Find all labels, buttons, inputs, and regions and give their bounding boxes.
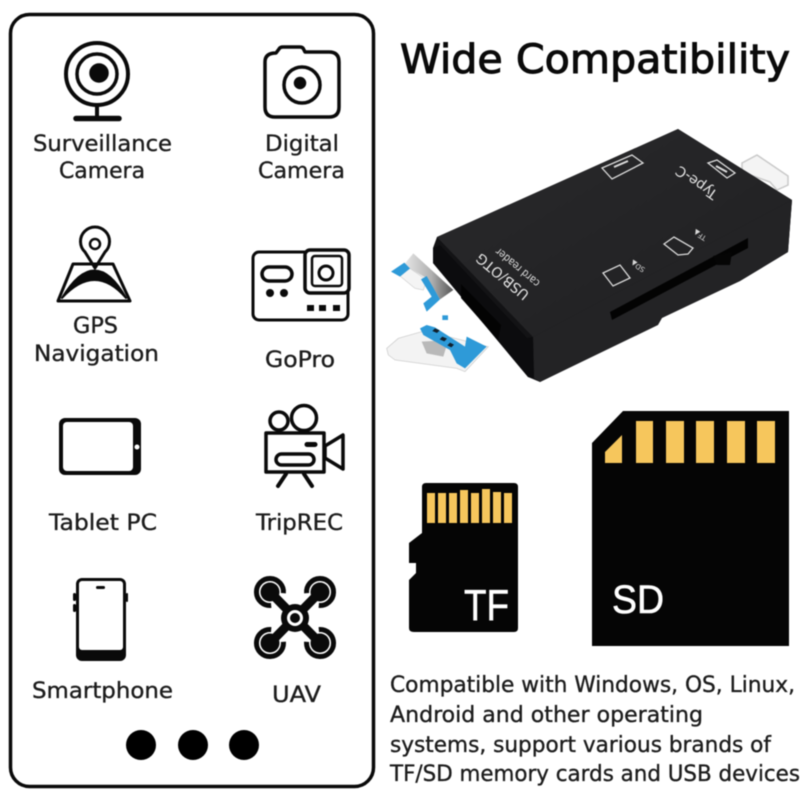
- TF card: [409, 483, 518, 632]
- SD label: SD: [612, 578, 664, 622]
- label: digital camera: [258, 132, 345, 184]
- SD contacts: [605, 421, 775, 463]
- card reader product: [387, 129, 792, 382]
- SD card: [592, 411, 789, 646]
- device markings: Type-C: [673, 162, 722, 203]
- icon: smartphone: [73, 578, 128, 661]
- card slots: [610, 238, 748, 320]
- label: TripREC: TripREC: [255, 511, 343, 536]
- label: surveillance camera: [33, 132, 172, 184]
- label: tablet PC: Tablet PC: [48, 511, 157, 536]
- label: GPS navigation: Navigation: [34, 342, 159, 367]
- label: surveillance camera: Camera: [59, 159, 145, 184]
- description text: Android and other operating: [390, 703, 703, 728]
- panel: compatible devices: [10, 14, 374, 786]
- label: GPS navigation: [34, 314, 159, 367]
- icon: TripREC film camera: [266, 406, 343, 486]
- device markings: SD▲: [629, 258, 647, 273]
- device markings: [473, 155, 735, 303]
- title: Wide Compatibility: [400, 37, 790, 83]
- device markings: card reader: [492, 245, 543, 290]
- front face: [533, 200, 792, 382]
- device markings: USB/OTG: [473, 249, 533, 303]
- usb connector: [387, 315, 488, 372]
- label: UAV: UAV: [272, 683, 321, 708]
- TF label: TF: [464, 581, 509, 630]
- description text: [389, 673, 800, 787]
- reader body: [433, 129, 792, 382]
- more devices dots: [126, 730, 259, 760]
- label: digital camera: Camera: [258, 159, 345, 184]
- device markings: TF▲: [692, 228, 709, 243]
- icon: GoPro: [253, 250, 349, 320]
- type-c connector: [742, 155, 788, 190]
- icon: tablet PC: [59, 418, 141, 475]
- TF contacts: [427, 489, 512, 523]
- description text: Compatible with Windows, OS, Linux,: [390, 673, 795, 698]
- icon: GPS navigation: [58, 227, 130, 301]
- label: GoPro: GoPro: [265, 348, 335, 373]
- label: GPS navigation: GPS: [73, 314, 118, 339]
- port on end cap: [461, 284, 501, 340]
- icon: digital camera: [265, 47, 339, 117]
- label: smartphone: Smartphone: [32, 679, 173, 704]
- micro usb connector: [391, 253, 453, 312]
- top face: [437, 129, 792, 337]
- icon: UAV drone: [256, 578, 334, 657]
- end cap: [433, 245, 534, 378]
- description text: systems, support various brands of: [390, 733, 772, 758]
- label: surveillance camera: Surveillance: [33, 132, 172, 157]
- icon: surveillance camera: [66, 43, 128, 118]
- label: digital camera: Digital: [265, 132, 339, 157]
- description text: TF/SD memory cards and USB devices: [389, 762, 800, 787]
